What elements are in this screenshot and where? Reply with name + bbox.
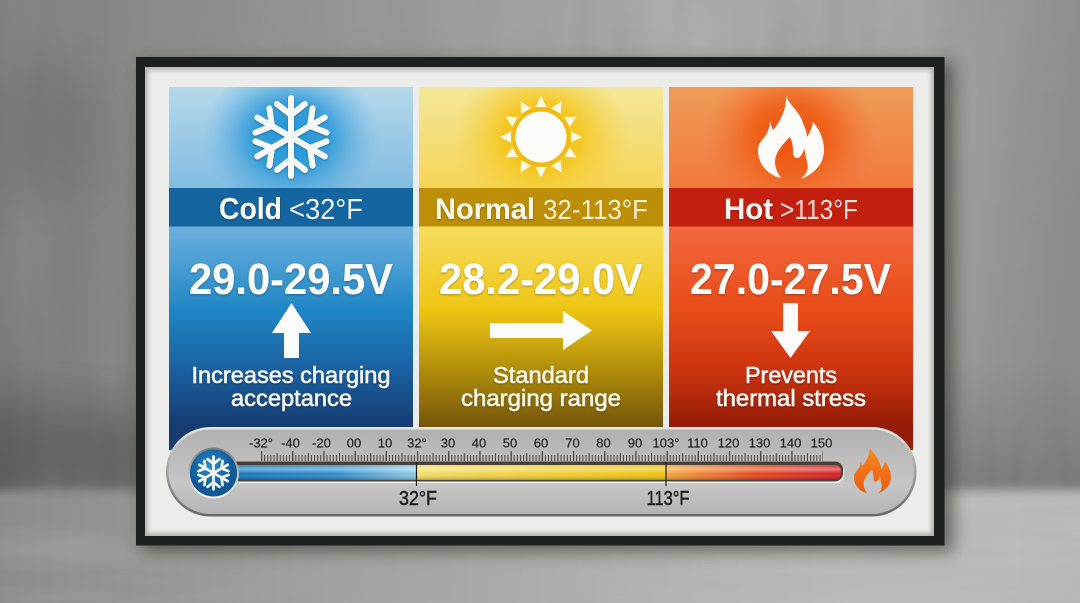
heading band: cold: Cold	[219, 191, 282, 226]
marker: 32°F: 32°F	[399, 488, 437, 510]
tick labels	[249, 436, 832, 450]
marker: 113°F: 113°F	[646, 488, 690, 510]
heading band: normal: 32-113°F	[543, 194, 648, 225]
tick labels: 60	[534, 436, 548, 450]
icon: scale snowflake	[188, 448, 239, 498]
tick marks	[261, 456, 823, 458]
panel: normal	[419, 87, 663, 427]
icon: snowflake	[250, 98, 332, 176]
tick labels: -20	[312, 436, 331, 450]
heading band: hot: Hot	[724, 193, 773, 226]
picture frame	[136, 57, 944, 546]
thermometer scale bar	[166, 427, 916, 516]
icon: sun	[500, 96, 582, 178]
tick labels: 140	[780, 436, 801, 450]
tick labels: 120	[718, 436, 739, 450]
tick labels: 110	[687, 436, 708, 450]
tick labels: 70	[565, 436, 580, 450]
text: normal effect: Standard	[493, 362, 589, 388]
tick labels: 10	[378, 436, 392, 450]
temperature track	[230, 462, 844, 483]
arrow: down	[771, 303, 810, 358]
text: cold effect: acceptance	[231, 385, 352, 411]
text: hot effect: thermal stress	[716, 385, 866, 411]
tick labels: -40	[281, 436, 300, 450]
heading band: normal	[419, 188, 663, 226]
tick labels: 80	[596, 436, 611, 450]
text: normal effect	[461, 362, 621, 411]
voltage: normal: 28.2-29.0V	[439, 255, 644, 304]
arrow: right	[490, 311, 592, 350]
panel: cold	[169, 61, 413, 450]
tick labels: 30	[441, 436, 455, 450]
heading band: hot: >113°F	[780, 194, 858, 225]
tick labels: 150	[811, 436, 832, 450]
tick labels: 50	[503, 436, 517, 450]
text: cold effect	[192, 362, 390, 411]
marker: 32°F	[399, 462, 437, 510]
heading band: hot	[669, 188, 913, 226]
tick labels: -32°	[249, 436, 273, 450]
tick labels: 00	[347, 436, 361, 450]
icon: flame	[758, 96, 824, 179]
text: hot effect	[716, 362, 866, 411]
text: normal effect: charging range	[461, 385, 621, 411]
tick labels: 130	[749, 436, 770, 450]
heading band: cold: <32°F	[289, 194, 363, 226]
icon: scale flame	[854, 447, 891, 493]
tick labels: 90	[628, 436, 642, 450]
heading band: normal: Normal	[435, 193, 535, 226]
tick labels: 40	[472, 436, 486, 450]
voltage: hot: 27.0-27.5V	[690, 255, 892, 304]
heading band: cold	[169, 188, 413, 226]
voltage: cold: 29.0-29.5V	[189, 255, 394, 304]
text: hot effect: Prevents	[745, 362, 837, 388]
marker: 113°F	[646, 462, 690, 510]
text: cold effect: Increases charging	[192, 362, 390, 388]
tick labels: 103°	[653, 436, 679, 450]
arrow: up	[272, 303, 311, 358]
tick labels: 32°	[407, 436, 427, 450]
panel: hot	[669, 62, 913, 450]
